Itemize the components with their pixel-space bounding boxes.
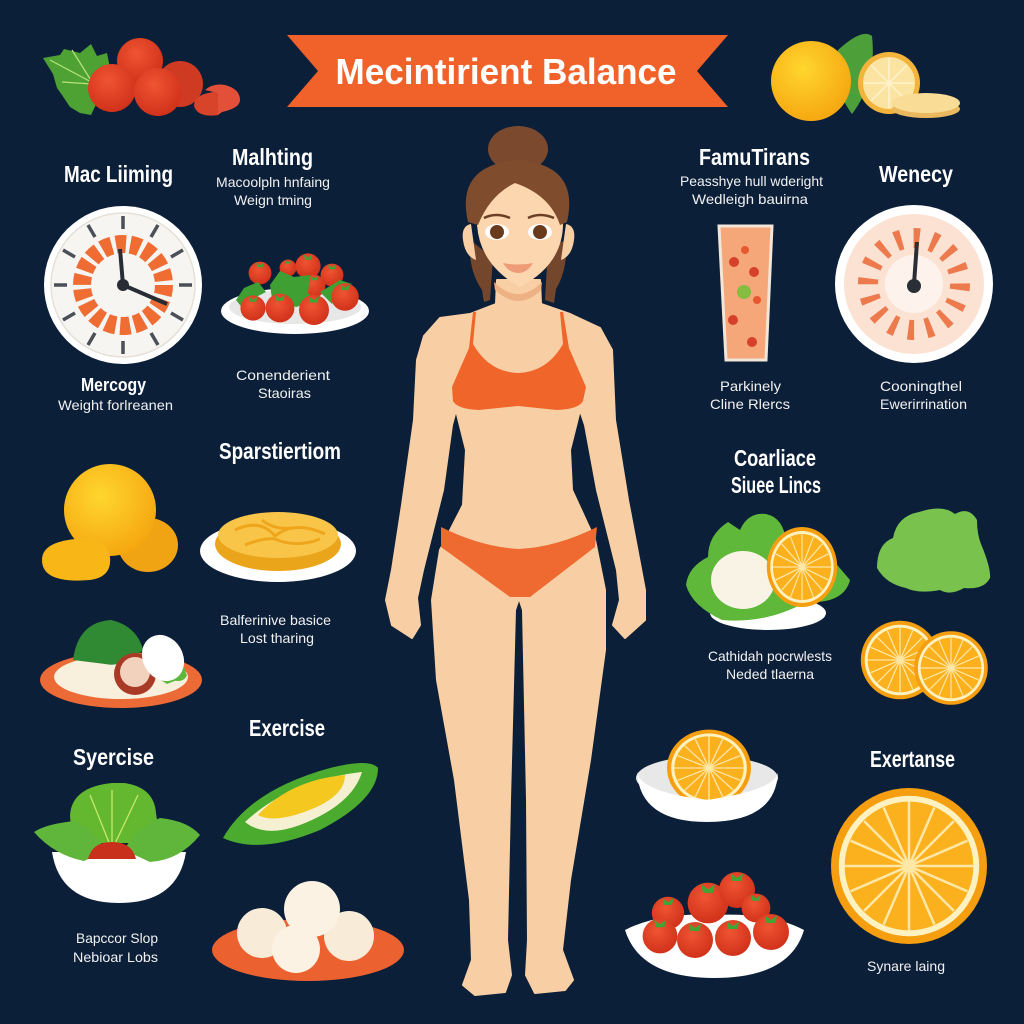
eyes	[485, 224, 552, 240]
text: Malhting: Macoolpln hnfaing	[216, 174, 330, 190]
text: Conenderient: Conenderient	[236, 367, 330, 383]
figure: woman	[386, 126, 645, 995]
mouth	[503, 263, 533, 273]
bikini top	[452, 312, 586, 410]
eyebrows	[484, 215, 554, 218]
heading: Exercise: Exercise	[249, 715, 325, 741]
icon: juice glass	[719, 226, 772, 360]
text: Mercogy: Mercogy	[81, 375, 146, 395]
icon: plate with greens	[40, 620, 202, 708]
body	[386, 280, 645, 995]
heading: left column: Mac Liiming	[64, 161, 173, 187]
text: Balferinive: Lost tharing	[240, 630, 314, 646]
text: Balferinive: Balferinive basice	[220, 612, 331, 628]
face	[477, 183, 563, 287]
icon: salad with orange	[686, 514, 850, 630]
title banner: Mecintirient Balance	[336, 51, 676, 92]
text: Mercogy	[58, 375, 173, 413]
heading: Coarliace: Coarliace	[734, 445, 816, 471]
icon: big orange	[831, 788, 987, 944]
icon: yellow fruit	[42, 464, 178, 581]
icon: tomato salad plate	[221, 253, 369, 334]
text: Malhting	[216, 144, 330, 208]
icon: orange bowl	[636, 730, 778, 822]
heading: Syercise: Syercise	[73, 744, 154, 770]
icon: clock	[44, 206, 202, 364]
text: Malhting: Malhting	[232, 144, 313, 170]
icon: avocado	[223, 763, 378, 845]
text: Bapccor	[73, 930, 158, 965]
icon: lettuce	[877, 508, 990, 593]
heading: Exertanse: Exertanse	[870, 746, 955, 772]
text: FamuTirans: Peasshye hull wderight	[680, 173, 823, 189]
hair strands	[470, 240, 566, 303]
hair	[466, 160, 569, 225]
text: Malhting: Weign tming	[234, 192, 312, 208]
icon: tomatoes top left	[43, 38, 240, 116]
heading: Sparstiertiom: Sparstiertiom	[219, 438, 341, 464]
bun	[488, 126, 548, 172]
bikini bottom	[441, 527, 597, 597]
text: FamuTirans	[680, 144, 823, 207]
text: FamuTirans: Wedleigh bauirna	[692, 191, 808, 207]
text: Parkinely	[710, 378, 790, 412]
heading: Coarliace	[731, 445, 821, 498]
text: Cathidah: Cathidah pocrwlests	[708, 648, 832, 664]
text: Cooningthel	[880, 378, 967, 412]
icon: tomato bowl	[625, 872, 804, 978]
text: Bapccor: Bapccor Slop	[76, 930, 158, 946]
text: Conenderient: Staoiras	[258, 385, 311, 401]
text: Cooningthel: Cooningthel	[880, 378, 962, 394]
text: Cathidah	[708, 648, 832, 682]
icon: pancake plate	[200, 512, 356, 582]
text: Cathidah: Neded tlaerna	[726, 666, 814, 682]
icon: salad bowl	[34, 783, 200, 903]
text: Synare laing: Synare laing	[867, 958, 945, 974]
heading: Coarliace: Siuee Lincs	[731, 472, 821, 498]
text: FamuTirans: FamuTirans	[699, 144, 810, 170]
text: Parkinely: Parkinely	[720, 378, 781, 394]
neck shadow	[494, 282, 542, 301]
icon: orange slices	[861, 621, 988, 705]
icon: lemons top right	[771, 34, 960, 121]
text: Bapccor: Nebioar Lobs	[73, 949, 158, 965]
icon: dial	[835, 205, 993, 363]
ears	[463, 224, 574, 260]
text: Conenderient	[236, 367, 330, 401]
text: Mercogy: Weight forlreanen	[58, 397, 173, 413]
heading: Wenecy: Wenecy	[879, 161, 953, 187]
text: Parkinely: Cline Rlercs	[710, 396, 790, 412]
title banner	[287, 35, 728, 107]
text: Balferinive	[220, 612, 331, 646]
icon: egg plate	[212, 881, 404, 981]
text: Cooningthel: Ewerirrination	[880, 396, 967, 412]
